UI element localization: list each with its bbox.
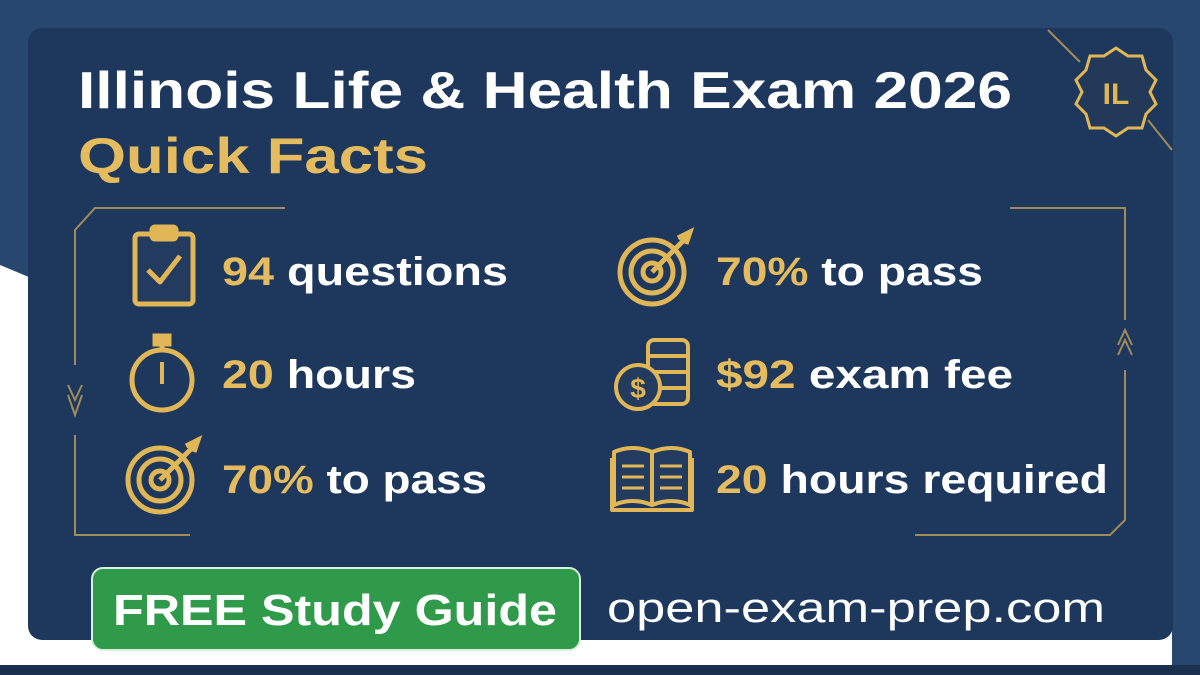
fact: 20 hours required: 20 hours required: [716, 458, 1108, 502]
badge: IL: IL: [1103, 78, 1129, 111]
fact: 94 questions: 94 questions: [222, 250, 508, 294]
fact: 70% to pass left: 70% to pass: [222, 458, 487, 502]
badge: IL: [1076, 48, 1156, 136]
button: FREE Study Guide: FREE Study Guide: [113, 586, 557, 635]
icon: coins: [616, 340, 688, 409]
button: FREE Study Guide: [92, 568, 580, 650]
icon: book: [612, 448, 692, 510]
fact: 20 hours: 20 hours: [222, 353, 416, 397]
title: Illinois Life & Health Exam 2026: [78, 62, 1012, 120]
icon: stopwatch: [132, 336, 192, 410]
url text: open-exam-prep.com: [607, 584, 1105, 631]
frame decoration: [68, 30, 1172, 535]
title: Quick Facts: [78, 128, 428, 184]
icon: target right: [620, 232, 690, 304]
icon: target left: [128, 440, 198, 512]
fact: $92 exam fee: $92 exam fee: [716, 353, 1013, 397]
icon: coins: $: [630, 373, 646, 404]
icon: clipboard check: [135, 227, 193, 304]
title: [78, 62, 1012, 184]
fact: 70% to pass right: 70% to pass: [716, 250, 983, 294]
